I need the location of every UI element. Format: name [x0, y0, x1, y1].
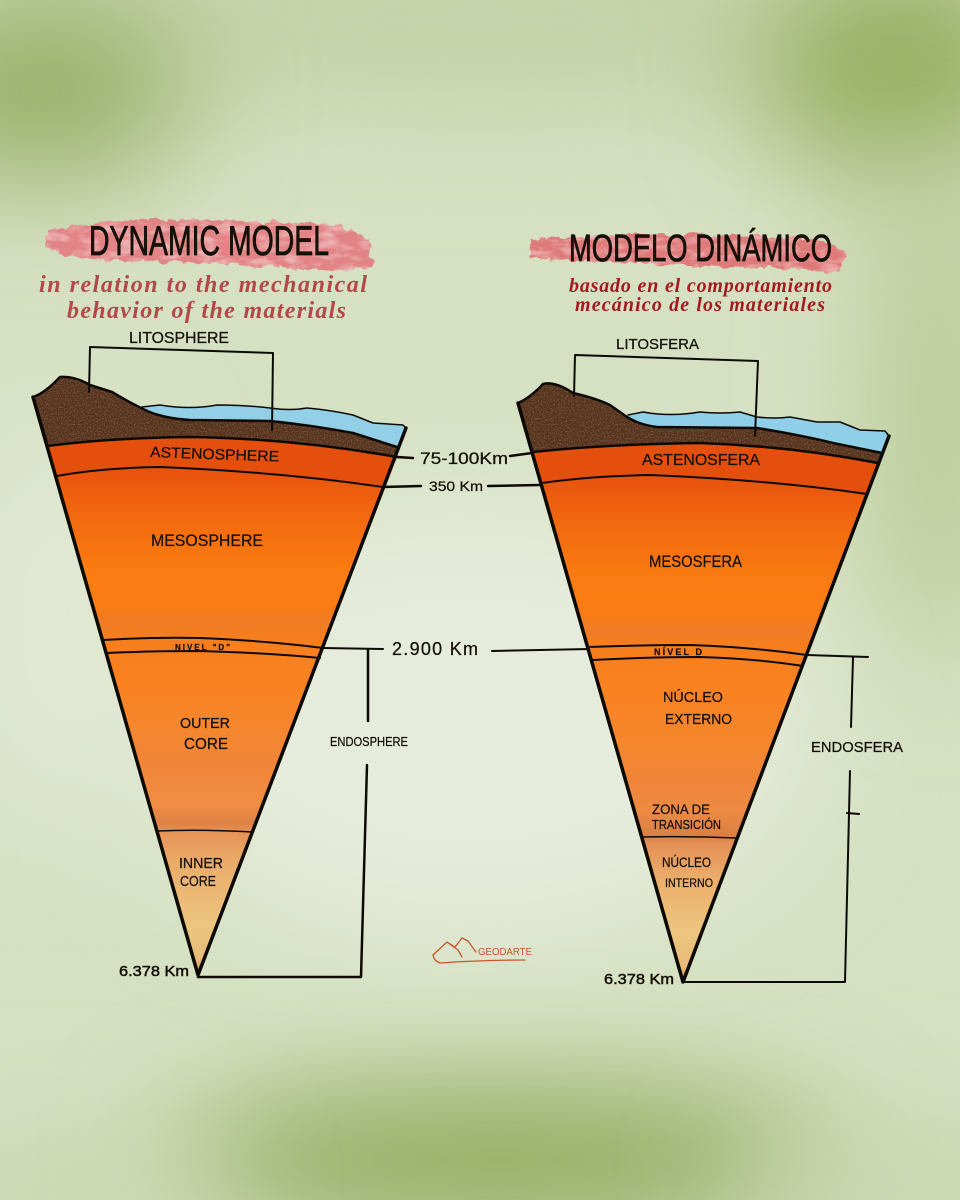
right: layer labels: NÚCLEO: [663, 689, 723, 706]
left: mantle and core fill: [47, 446, 397, 975]
left depth label: 6.378 km: 6.378 Km: [119, 963, 189, 980]
subtitle: spanish: [569, 275, 832, 316]
left: boundary outlines: [33, 377, 406, 975]
left: layer labels: CORE: [184, 736, 228, 753]
left: layer labels: ASTENOSPHERE: [150, 444, 279, 465]
left: layer labels: CORE: [180, 873, 216, 890]
right: layer labels: ZONA DE: [652, 801, 710, 817]
subtitle: english: [39, 272, 367, 324]
left lithosphere bracket: LITOSPHERE: [129, 330, 229, 347]
depth marker: 2.900 km: 2.900 Km: [392, 639, 478, 659]
right endosfera bracket: ENDOSFERA: [811, 739, 903, 756]
right: water: [628, 412, 889, 460]
left: layer labels: OUTER: [180, 715, 230, 732]
right earth wedge: [518, 383, 889, 982]
left endosphere bracket: ENDOSPHERE: [330, 734, 408, 749]
left lithosphere bracket: [89, 330, 273, 430]
left: layer labels: [150, 444, 279, 890]
left: water: [142, 405, 406, 455]
right: layer labels: [642, 452, 760, 890]
title: dynamic model: [47, 217, 372, 271]
left: layer labels: INNER: [179, 855, 223, 872]
right lithosphere bracket: [574, 336, 758, 436]
title: modelo dinamico: MODELO DINÁMICO: [569, 227, 832, 270]
depth marker: 2.900 km: [323, 639, 590, 659]
left: astenosphere band: [47, 437, 397, 487]
subtitle: english: in relation to the mechanical: [39, 272, 367, 298]
left endosphere bracket: [198, 650, 408, 977]
right: mantle and core fill: [533, 452, 878, 982]
logo: geodarte: GEODARTE: [478, 946, 532, 958]
right: boundary outlines: [518, 383, 889, 982]
left earth wedge: [33, 377, 406, 975]
subtitle: spanish: mecánico de los materiales: [575, 294, 825, 316]
subtitle: english: behavior of the materials: [67, 298, 346, 324]
right lithosphere bracket: LITOSFERA: [616, 336, 699, 353]
right: layer labels: NÚCLEO: [662, 854, 711, 870]
right: layer labels: TRANSICIÓN: [652, 817, 721, 832]
right: astenosfera band: [533, 443, 878, 494]
left: layer labels: NIVEL "D": [175, 643, 230, 652]
right: layer labels: INTERNO: [665, 876, 713, 890]
depth marker: 350 km: 350 Km: [429, 478, 483, 494]
logo: geodarte: [433, 938, 532, 963]
right endosfera bracket: [683, 655, 903, 982]
title: dynamic model: DYNAMIC MODEL: [89, 217, 329, 264]
right depth label: 6.378 km: 6.378 Km: [604, 971, 674, 988]
right: lithosphere crust: [518, 383, 884, 463]
depth marker: 75-100 km: [397, 449, 532, 468]
left: layer labels: MESOSPHERE: [151, 531, 263, 550]
right: layer labels: EXTERNO: [665, 711, 732, 728]
title: modelo dinamico: [530, 227, 844, 272]
right: layer labels: NÍVEL D: [654, 647, 702, 657]
right: layer labels: MESOSFERA: [649, 552, 743, 571]
subtitle: spanish: basado en el comportamiento: [569, 275, 832, 297]
left: lithosphere crust: [33, 377, 399, 457]
depth marker: 75-100 km: 75-100Km: [420, 449, 508, 468]
right: layer labels: ASTENOSFERA: [642, 452, 760, 469]
